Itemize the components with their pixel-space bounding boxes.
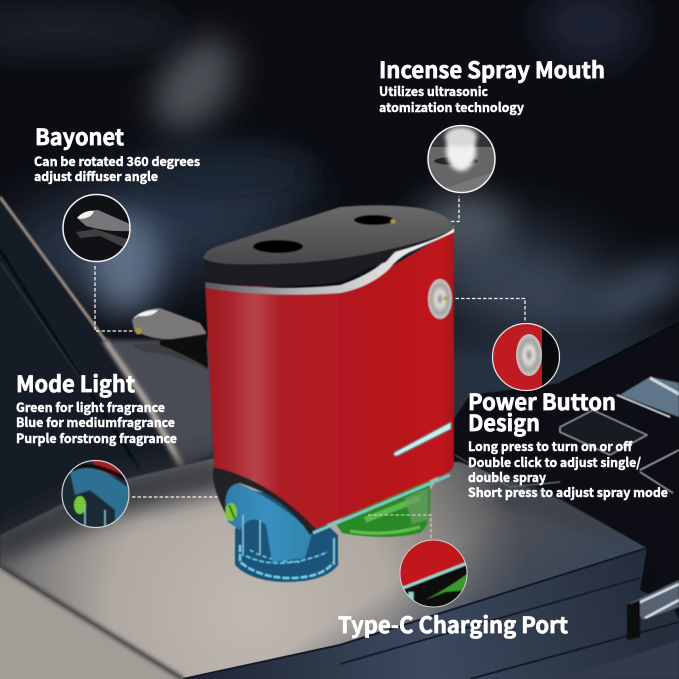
text block: bayonet: Bayonet <box>35 120 124 152</box>
text block: power button design: Power Button <box>468 385 616 417</box>
lit panel behind clip <box>110 340 215 467</box>
text block: power button design: Long press to turn on or off <box>468 436 633 455</box>
vent clip <box>132 308 208 370</box>
text block: bayonet <box>34 120 200 185</box>
console <box>453 315 679 640</box>
callout circle: spray mouth <box>427 124 496 194</box>
blue cartridge <box>221 483 338 582</box>
left door panel <box>0 197 182 535</box>
callout circle: power button <box>492 322 560 392</box>
heading: type-C charging port: Type-C Charging Port <box>338 608 568 640</box>
green cartridge <box>336 472 442 537</box>
armrest top <box>0 458 647 679</box>
tan trim strip <box>0 197 105 340</box>
text block: incense spray mouth: Utilizes ultrasonic <box>379 81 488 100</box>
text block: incense spray mouth: Incense Spray Mouth <box>379 53 605 85</box>
cyan base trim <box>313 475 450 533</box>
text block: bayonet: adjust diffuser angle <box>34 166 158 185</box>
power button <box>428 279 452 319</box>
armrest front leather <box>183 548 679 679</box>
dashed leader lines <box>95 196 525 497</box>
text block: mode light: Mode Light <box>16 367 135 399</box>
silver body strip <box>205 226 454 295</box>
text block: power button design <box>468 385 668 501</box>
text block: power button design: double spray <box>468 467 546 486</box>
dark base band <box>213 467 316 535</box>
text block: incense spray mouth: atomization technology <box>379 97 524 116</box>
callout circle: mode light <box>60 458 132 530</box>
leader line: type-C <box>368 515 431 540</box>
text block: mode light: Green for light fragrance <box>16 397 165 416</box>
text block: power button design: Double click to adjust single/ <box>468 452 641 471</box>
red body <box>205 230 454 529</box>
text block: incense spray mouth <box>379 53 605 116</box>
LED indicator slot <box>394 422 451 456</box>
text block: bayonet: Can be rotated 360 degrees <box>34 151 200 170</box>
text block: mode light <box>16 367 177 447</box>
text block: mode light: Purple forstrong fragrance <box>16 428 177 447</box>
callout circle: bayonet <box>62 194 131 262</box>
text block: power button design: Short press to adjust spray mode <box>468 482 668 501</box>
product: diffuser <box>132 205 454 582</box>
armrest lower left panel <box>0 567 183 679</box>
text block: power button design: Design <box>468 406 540 438</box>
callout circle: type-C port <box>400 540 468 608</box>
text block: mode light: Blue for mediumfragrance <box>16 412 175 431</box>
lid <box>203 205 454 287</box>
